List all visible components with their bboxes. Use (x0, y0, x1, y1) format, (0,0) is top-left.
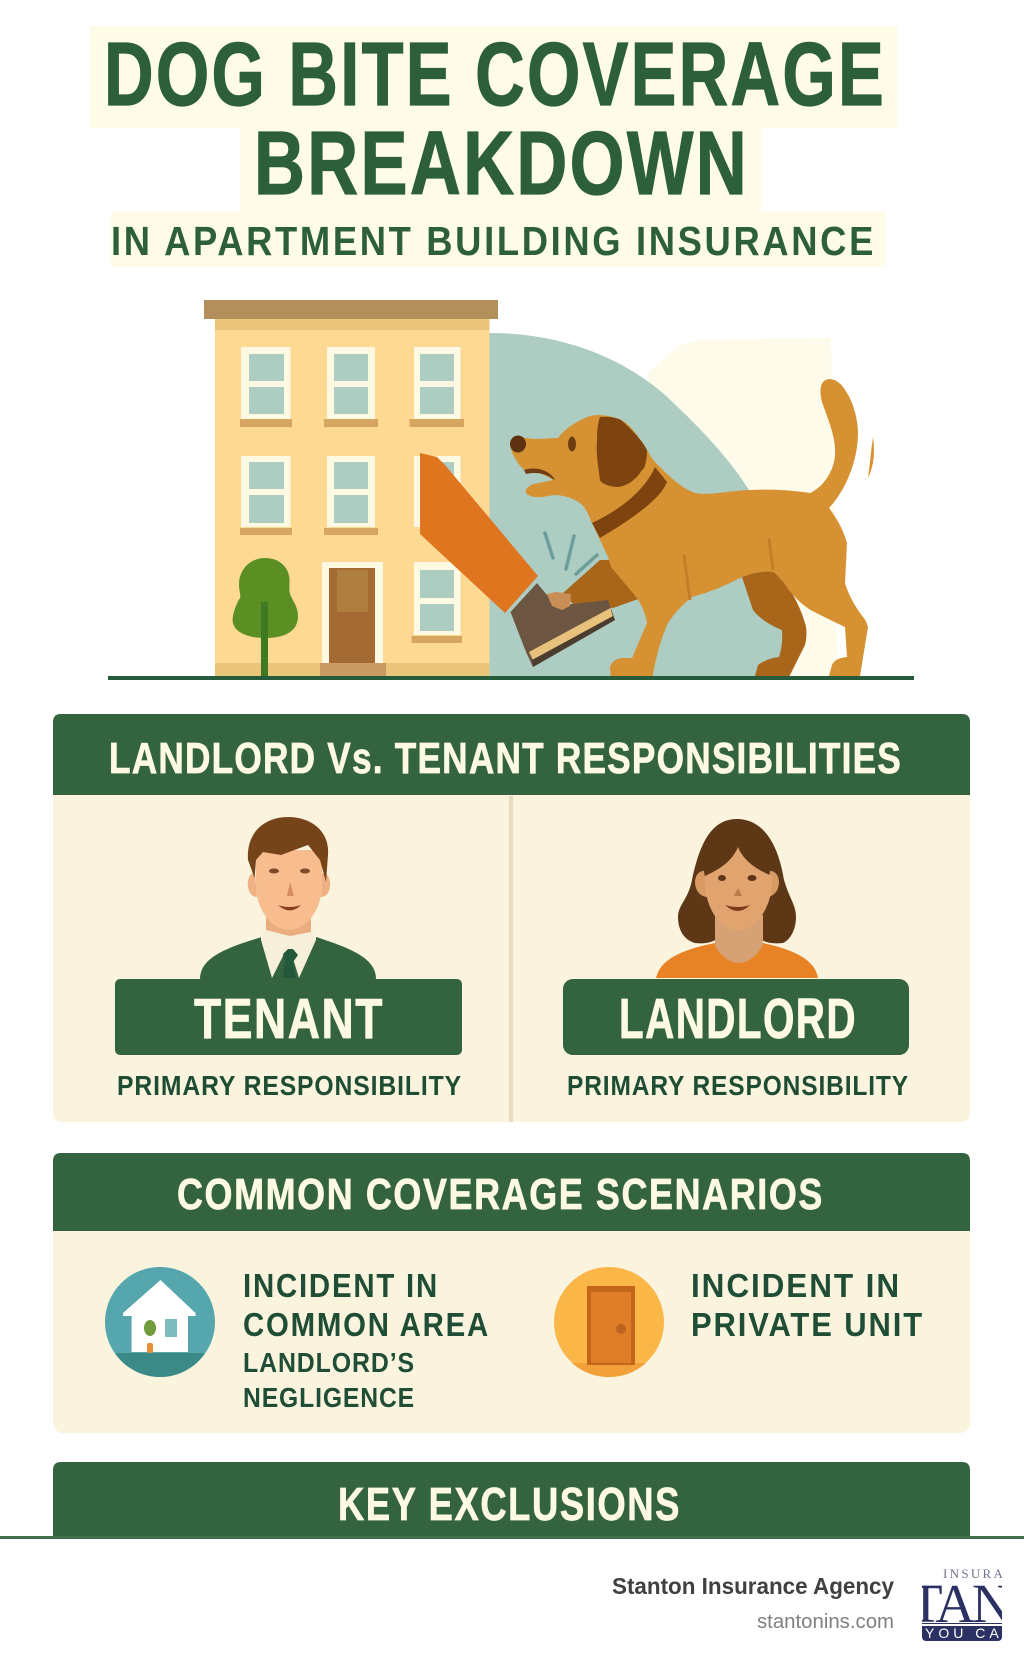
common area text: COMMON AREA (243, 1306, 490, 1343)
landlord label: LANDLORD (619, 987, 857, 1051)
window row 2 (240, 456, 460, 535)
landlord sublabel: PRIMARY RESPONSIBILITY (567, 1070, 909, 1101)
dog ear (597, 417, 647, 487)
common area text: NEGLIGENCE (243, 1382, 415, 1413)
panel header (53, 1462, 970, 1537)
panel body (53, 1153, 970, 1433)
private unit text: INCIDENT IN (691, 1267, 901, 1304)
landlord figure (656, 819, 818, 978)
ears (248, 873, 330, 897)
subtitle: IN APARTMENT BUILDING INSURANCE (111, 218, 876, 264)
window row 1 (240, 347, 464, 427)
hair (248, 817, 328, 882)
window row 3 (412, 562, 462, 643)
dog body (510, 379, 868, 676)
shirt (656, 943, 818, 978)
common area text (243, 1267, 490, 1413)
door (320, 562, 386, 676)
agency name: Stanton Insurance Agency (612, 1573, 894, 1599)
impact marks (545, 533, 597, 574)
footer (0, 1536, 1024, 1641)
ground line (108, 676, 914, 680)
illustration: dog biting a leg outside an apartment building (108, 300, 914, 680)
icon: house in teal circle (105, 1267, 215, 1377)
private unit text: PRIVATE UNIT (691, 1306, 924, 1343)
tree (233, 558, 298, 676)
panel: key exclusions (53, 1462, 970, 1537)
panel header (53, 1153, 970, 1231)
neck (715, 915, 763, 963)
ears (695, 871, 779, 897)
shoe (510, 583, 615, 667)
panel heading: COMMON COVERAGE SCENARIOS (177, 1170, 824, 1219)
teal background arc (490, 333, 788, 676)
jacket (200, 937, 376, 979)
title block (90, 25, 897, 267)
panel: common coverage scenarios (53, 1153, 970, 1433)
website: stantonins.com (757, 1611, 894, 1633)
tenant figure (200, 817, 376, 979)
panel heading: KEY EXCLUSIONS (338, 1478, 681, 1530)
dog shading (684, 538, 773, 600)
neck and face (266, 905, 311, 936)
sleeve (420, 453, 538, 613)
dog nose (510, 436, 526, 452)
tenant sublabel: PRIMARY RESPONSIBILITY (117, 1070, 462, 1101)
dog far hind leg (742, 572, 806, 676)
dog mouth (524, 468, 555, 480)
tail motion mark (868, 437, 874, 478)
private unit text (691, 1267, 924, 1343)
face details (718, 875, 726, 881)
tie (283, 949, 298, 978)
panel body (53, 714, 970, 1122)
face (705, 847, 772, 930)
dog lifted front leg (563, 560, 650, 608)
dog eye (568, 436, 576, 452)
common area text: LANDLORD’S (243, 1347, 415, 1378)
cream background shape (647, 338, 838, 676)
dog collar (592, 467, 667, 538)
logo: TAN (909, 1573, 1011, 1634)
building (204, 300, 498, 676)
divider (509, 796, 513, 1122)
tenant badge (115, 979, 462, 1055)
dog (510, 379, 874, 676)
hair (678, 819, 796, 943)
panel: landlord vs tenant responsibilities (53, 714, 970, 1122)
title line 2: BREAKDOWN (254, 114, 749, 214)
tenant label: TENANT (194, 987, 384, 1051)
face details (269, 868, 279, 874)
icon: door in orange circle (554, 1267, 664, 1377)
shirt (261, 930, 316, 978)
panel header (53, 714, 970, 795)
logo: YOU CAN (925, 1625, 1017, 1641)
common area text: INCIDENT IN (243, 1267, 439, 1304)
landlord badge (563, 979, 909, 1055)
